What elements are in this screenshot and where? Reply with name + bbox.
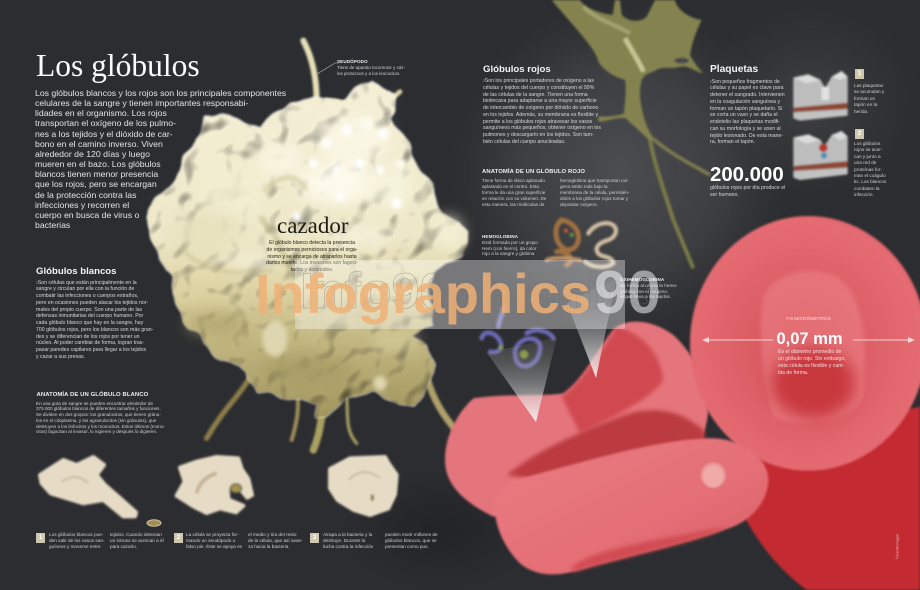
text: glóbulos blancos: núcleo. Al poder cambiar de forma, logran tras-: [36, 340, 144, 346]
measurement text: Es el diámetro promedio de: [778, 349, 841, 355]
intro text: transportan el oxígeno de los pulmo-: [35, 118, 176, 128]
step 3 number: 3: [313, 535, 316, 541]
hemoglobina title: HEMOGLOBINA: [482, 234, 518, 239]
image credit: ©Joe M Images: [896, 534, 900, 559]
text: anatomía glóbulo rojo column 1: [482, 178, 546, 207]
statistic caption: [710, 184, 785, 198]
step 2 text continued: za hacia la bacteria.: [248, 544, 290, 549]
step 2 text: La célula se proyecta for-: [186, 532, 239, 537]
platelet step 1 number: 1: [858, 71, 861, 77]
text: anatomía glóbulo rojo column 2: doles a los glóbulos rojos tomar y: [560, 196, 628, 201]
text: plaquetas: ›Son pequeños fragmentos de: [710, 78, 780, 84]
step 1: [36, 532, 164, 549]
text: plaquetas: detener el sangrado. Intervienen: [710, 92, 785, 98]
text: glóbulos rojos: de las células de la sangre. Tienen una forma: [483, 92, 588, 98]
text: plaquetas: forman un tapón plaquetario. Si: [710, 106, 782, 112]
step 1 text: guíneos y moverse entre: [49, 544, 101, 549]
hemoglobina text: rojo a la sangre y globina: [482, 251, 534, 256]
text: plaquetas: células y su papel es clave para: [710, 85, 784, 91]
oxihemoglobina text: globina con el oxígeno,: [620, 289, 668, 294]
step 2 text continued: el medio y tira del resto: [248, 532, 296, 537]
text: anatomía glóbulo rojo column 1: esta manera, las moléculas de: [482, 202, 544, 207]
text: anatomía glóbulo blanco: citos) fagocitan al invasor, lo ingieren y después lo digieren.: [36, 429, 157, 434]
platelet step 1 text: se acumulan y: [854, 89, 884, 94]
heading: anatomía glóbulo rojo: ANATOMÍA DE UN GLÓBULO ROJO: [482, 169, 585, 175]
intro text: que los rojos, pero se encargan: [35, 179, 157, 189]
seudópodo leader line: [317, 62, 339, 74]
intro text: mueren en el bazo. Los glóbulos: [35, 159, 161, 169]
step 2 number: [174, 533, 183, 543]
text: glóbulos rojos: permite a los glóbulos rojos atravesar los vasos: [483, 118, 592, 124]
step 3 text continued: [385, 532, 438, 549]
seudópodo callout: [337, 58, 405, 76]
text: anatomía glóbulo rojo column 2: geno están más bajo la: [560, 184, 608, 189]
text: glóbulos blancos: 700 glóbulos rojos, pero los blancos son más gran-: [36, 327, 153, 333]
platelet step 1 text: forman un: [854, 96, 875, 101]
platelet step 1 text: [854, 83, 884, 114]
cazador text: nismo y se encarga de atraparlos hasta: [267, 254, 357, 260]
oxihemoglobina label: [620, 277, 678, 299]
cazador text: [266, 240, 358, 273]
step 2 text: [186, 532, 242, 549]
step 1 cell illustration: [40, 457, 136, 516]
intro text: celulares de la sangre y tienen importantes responsabi-: [35, 98, 248, 108]
platelet block diagram 1: [793, 71, 848, 121]
seudópodo title: SEUDÓPODO: [337, 59, 368, 64]
title: Los glóbulos: [36, 48, 200, 83]
text: glóbulos blancos: defensas inmunitarias del cuerpo humano. Por: [36, 313, 143, 319]
step 2: [174, 532, 303, 549]
step 3 cell illustration: [330, 457, 397, 515]
step 3 text: lucha contra la infección: [323, 544, 373, 549]
text: anatomía glóbulo rojo column 1: aplastado en el centro. Esta: [482, 184, 539, 189]
text: anatomía glóbulo blanco: 375.000 glóbulos blancos de diferentes tamaños y funciones.: [36, 406, 161, 411]
intro text: bacterias: [35, 220, 70, 230]
step 2 text: mando un seudópodo o: [186, 538, 235, 543]
step 3 text: destruye. Durante la: [323, 538, 365, 543]
step 2 number: 2: [177, 535, 180, 541]
text: glóbulos blancos: combatir las infecciones o cuerpos extraños,: [36, 293, 138, 299]
hemoglobina label: [482, 234, 538, 256]
intro text: [35, 88, 286, 230]
measurement text: un glóbulo rojo. Sin embargo,: [778, 356, 846, 362]
measurement arrow right: [853, 337, 915, 343]
oxihemoglobina text: [620, 283, 678, 299]
intro text: lidades en el organismo. Los rojos: [35, 108, 167, 118]
text: glóbulos rojos: bién células del cuerpo anucleadas.: [483, 139, 565, 145]
step 3 text: Atrapa a la bacteria y la: [323, 532, 372, 537]
step 2 text continued: de la célula, que así avan-: [248, 538, 303, 543]
white blood cell photo: [147, 41, 468, 450]
step 1 text continued: un intruso se acercan a él: [110, 538, 164, 543]
intro text: nes a los tejidos y el dióxido de car-: [35, 129, 173, 139]
statistic caption: glóbulos rojos por día produce el: [710, 184, 785, 190]
measurement text: esta célula es flexible y cam-: [778, 363, 844, 369]
step 2 cell illustration: [177, 457, 252, 513]
text: glóbulos blancos: cada glóbulo blanco que hay en la sangre, hay: [36, 320, 143, 326]
watermark: [255, 259, 661, 329]
platelet step 2 text: proteínas for-: [854, 167, 882, 172]
intro text: de la protección contra las: [35, 190, 136, 200]
text: plaquetas: tejido lesionado. De esta mane-: [710, 132, 783, 138]
heading: glóbulos blancos: Glóbulos blancos: [36, 266, 116, 276]
intro text: blancos tienen menor presencia: [35, 169, 158, 179]
measurement text: [778, 349, 846, 376]
platelet step 2 text: can y junto a: [854, 154, 881, 159]
platelet step 1 text: tapón en la: [854, 102, 877, 107]
statistic: 200.000: 200.000: [710, 164, 784, 186]
step 2 text continued: [248, 532, 303, 549]
intro text: Los glóbulos blancos y los rojos son los principales componentes: [35, 88, 286, 98]
text: plaquetas: ra, forman el tapón.: [710, 139, 755, 145]
text: glóbulos rojos: de intercambio de oxígeno por dióxido de carbono: [483, 105, 598, 111]
intro text: infecciones y recorren el: [35, 200, 129, 210]
platelet block diagram 2: [793, 131, 848, 180]
text: anatomía glóbulo blanco: En una gota de sangre se pueden encontrar alrededor de: [36, 400, 153, 406]
text: plaquetas: can su morfología y se unen al: [710, 126, 781, 132]
step 3: [310, 532, 438, 549]
step 1 text continued: [110, 532, 164, 549]
step 2 text: falso pie. Éste se apoya en: [186, 544, 242, 549]
seudópodo text: Tiene de aparato locomotor y cáz-: [337, 65, 405, 70]
text: glóbulos blancos: [36, 280, 154, 360]
watermark orange text: Infographics: [255, 262, 591, 325]
text: anatomía glóbulo rojo column 2: depositar oxígeno.: [560, 202, 598, 207]
text: glóbulos rojos: sanguíneos más pequeños, obtener oxígeno en los: [483, 125, 601, 131]
platelet step 2 number: 2: [858, 131, 861, 137]
hemoglobin tangle purple: [482, 308, 553, 366]
platelet step 2 text: man el coágulo: [854, 173, 886, 178]
text: anatomía glóbulo rojo column 1: en relación con su volumen. De: [482, 196, 546, 201]
text: anatomía glóbulo rojo column 1: forma le da una gran superficie: [482, 190, 545, 195]
oxihemoglobina text: Se forma al unirse la hemo-: [620, 283, 678, 288]
statistic caption: ser humano.: [710, 192, 739, 198]
red blood cells photo: [445, 216, 920, 590]
measurement label: 7-8 MICRÓMETROS: [786, 316, 831, 322]
intro text: cuerpo en busca de virus o: [35, 210, 139, 220]
step 1 number: [36, 533, 45, 543]
oxihemoglobina text: al que lleva a los tejidos.: [620, 294, 671, 299]
step 3 number: [310, 533, 319, 543]
step 1 text: [49, 532, 104, 549]
step 1 text: Los glóbulos blancos pue-: [49, 532, 103, 537]
platelet step 1 text: herida.: [854, 109, 868, 114]
platelet step 1 number: [855, 69, 864, 79]
text: glóbulos blancos: pasar paredes capilares para llegar a los tejidos: [36, 347, 146, 353]
heading: plaquetas: Plaquetas: [710, 64, 758, 74]
text: glóbulos blancos: sangre y circulan por ella con la función de: [36, 286, 134, 292]
platelet step 2 text: infección.: [854, 192, 874, 197]
platelet step 2 text: Los glóbulos: [854, 141, 880, 146]
hemoglobin tangle brown: [547, 220, 616, 267]
cazador text: El glóbulo blanco detecta la presencia: [269, 240, 355, 246]
step 1 text continued: tejidos. Cuando detectan: [110, 532, 162, 537]
text: glóbulos rojos: células y tejidos del cuerpo y constituyen el 99%: [483, 85, 594, 91]
text: glóbulos blancos: ›Son células que están principalmente en la: [36, 280, 137, 286]
measurement text: bia de forma.: [778, 370, 808, 376]
hemoglobina text: Hem (con hierro), da color: [482, 246, 536, 251]
text: glóbulos blancos: des y se diferencian de los rojos por tener un: [36, 334, 140, 340]
text: anatomía glóbulo blanco: los en el citoplasma, y los agranulocitos (sin gránulos), que: [36, 418, 156, 423]
cazador heading: cazador: [277, 213, 348, 238]
text: glóbulos rojos: pulmones y descargarlo en los tejidos. Son tam-: [483, 132, 594, 138]
text: plaquetas: se corta un vaso y se daña el: [710, 112, 777, 118]
step 1 number: 1: [39, 535, 42, 541]
text: anatomía glóbulo rojo column 2: hemoglobina que transportan oxí-: [560, 178, 629, 182]
text: anatomía glóbulo rojo column 2: [560, 178, 630, 207]
platelet step 2 text: combaten la: [854, 186, 880, 191]
platelet step 2 text: una red de: [854, 160, 876, 165]
text: glóbulos rojos: biotincava para adaptarse a una mayor superficie: [483, 98, 597, 104]
platelet step 2 text: rojos se acer-: [854, 147, 882, 152]
text: anatomía glóbulo rojo column 1: Tiene forma de disco aplanado: [482, 178, 545, 182]
cazador text: de organismos perniciosos para el orga-: [267, 247, 357, 253]
text: anatomía glóbulo blanco: [36, 400, 165, 434]
text: glóbulos rojos: en los tejidos. Además, su membrana es flexible y: [483, 112, 598, 118]
step 3 text continued: glóbulos blancos, que se: [385, 538, 437, 543]
oxihemoglobina title: OXIHEMOGLOBINA: [620, 277, 664, 282]
cazador text: tados y destruidos.: [291, 267, 333, 273]
watermark 90: 90: [594, 259, 661, 326]
text: glóbulos blancos: pero en ocasiones pueden atacar los tejidos nor-: [36, 300, 148, 306]
text: glóbulos rojos: [483, 78, 601, 145]
magnifier cones: [487, 277, 617, 422]
seudópodo text: [337, 65, 405, 76]
cazador text: darlos muerte. Los invasores son fagoci-: [266, 260, 358, 266]
hemoglobina text: Está formada por un grupo: [482, 240, 538, 245]
platelet step 2 number: [855, 129, 864, 139]
text: plaquetas: endotelio las plaquetas modifi-: [710, 119, 780, 125]
watermark band: [295, 260, 625, 329]
text: anatomía glóbulo rojo column 2: membrana de la célula, permitién-: [560, 190, 629, 195]
step 3 text continued: presentan como pus.: [385, 544, 429, 549]
measurement arrow left: [702, 337, 773, 343]
seudópodo text: los protozoos y a los leucocitos.: [337, 71, 401, 76]
text: glóbulos blancos: males del propio cuerpo. Son una parte de las: [36, 306, 142, 312]
step 3 text: [323, 532, 373, 549]
text: plaquetas: en la coagulación sanguínea y: [710, 99, 780, 105]
platelet photo: [552, 0, 710, 268]
bacterium 1: [147, 520, 161, 526]
platelet step 2 text: [854, 141, 886, 197]
intro text: bono en el camino inverso. Viven: [35, 139, 163, 149]
text: glóbulos rojos: ›Son los principales portadores de oxígeno a las: [483, 78, 594, 84]
heading: anatomía glóbulo blanco: ANATOMÍA DE UN GLÓBULO BLANCO: [36, 392, 148, 398]
text: glóbulos blancos: y cazar a sus presas.: [36, 354, 85, 360]
hemoglobina text: [482, 240, 538, 256]
text: anatomía glóbulo blanco: Se dividen en dos grupos: los granulocitos, que tienen gránu-: [36, 412, 161, 417]
step 3 text continued: pueden morir millones de: [385, 532, 438, 537]
measurement value: 0,07 mm: [776, 330, 843, 348]
text: plaquetas: [710, 78, 785, 145]
intro text: alrededor de 120 días y luego: [35, 149, 150, 159]
step 1 text continued: para cazarlo.: [110, 544, 137, 549]
step 1 text: den salir de los vasos san-: [49, 538, 104, 543]
platelet step 1 text: Las plaquetas: [854, 83, 883, 88]
platelet step 2 text: tic. Los blancos: [854, 179, 886, 184]
heading: glóbulos rojos: Glóbulos rojos: [483, 64, 551, 74]
text: anatomía glóbulo blanco: destruyen a los linfocitos y los monocitos. Estos últimos (mono-: [36, 424, 165, 429]
